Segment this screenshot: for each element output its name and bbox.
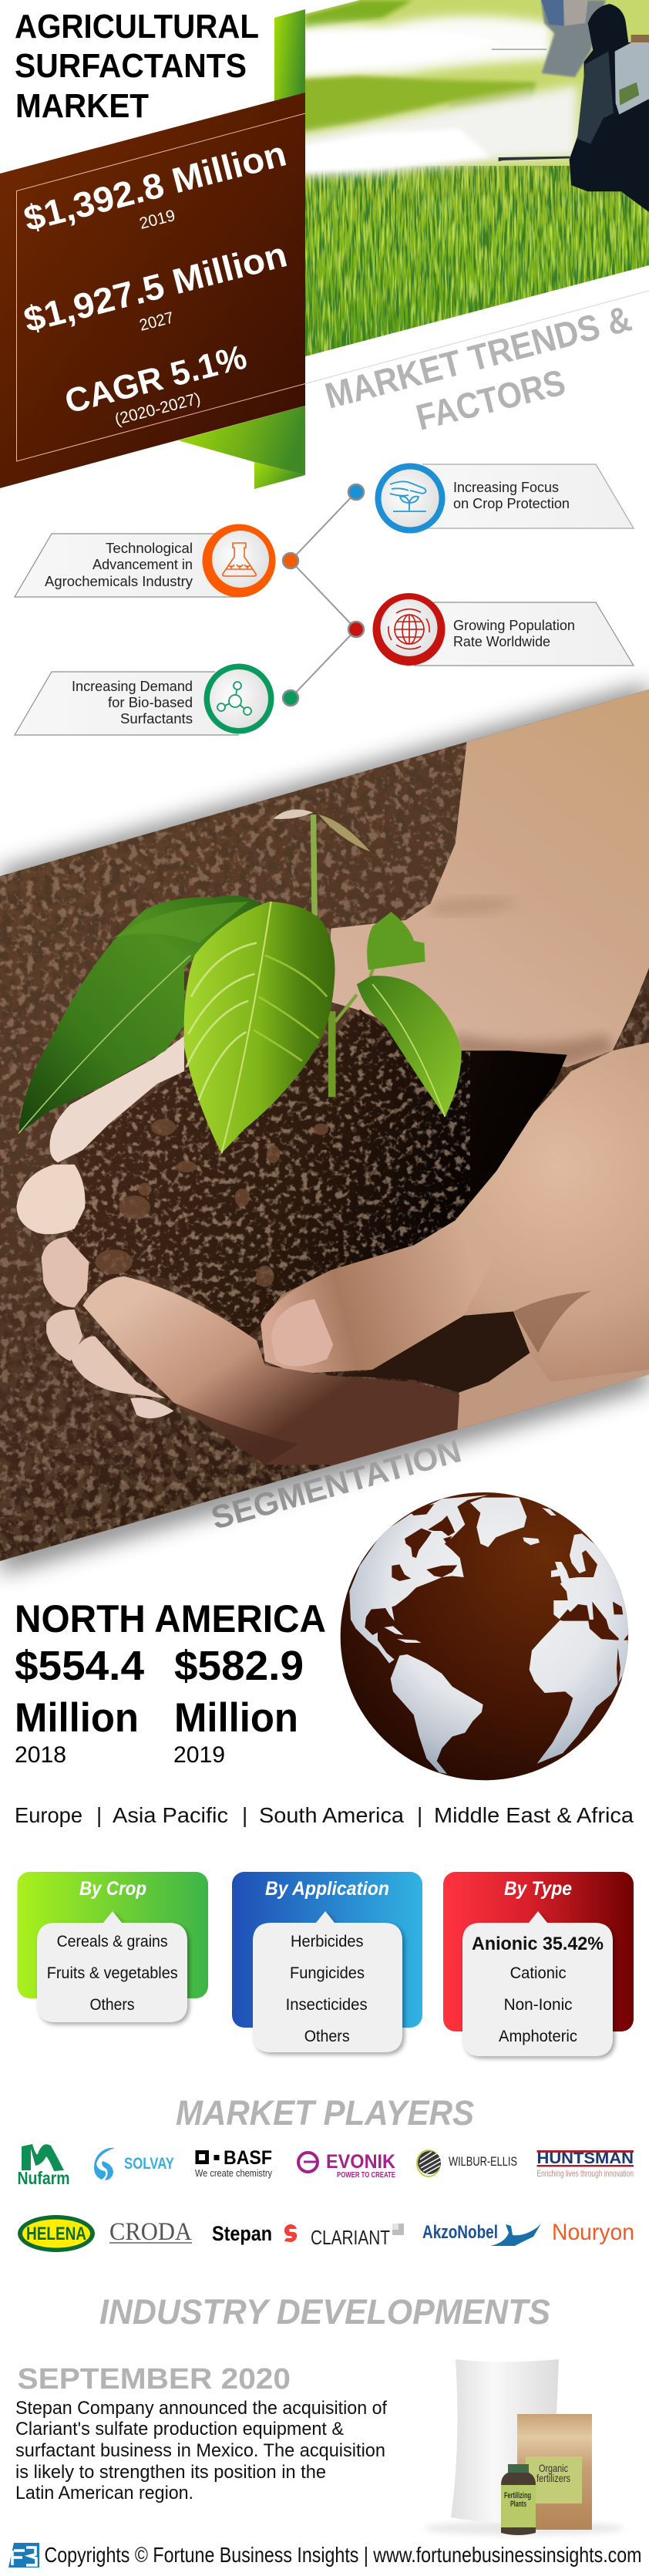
trend dots bbox=[283, 484, 364, 706]
logo: Huntsman bbox=[536, 2150, 634, 2179]
panel: north america stats bbox=[15, 1597, 326, 1768]
bottle bbox=[501, 2464, 536, 2535]
trend: technological advancement bbox=[15, 524, 276, 597]
stat: 2018: 2018 bbox=[15, 1742, 66, 1768]
list items: Others bbox=[89, 1996, 134, 2014]
stat: CAGR: CAGR 5.1% bbox=[61, 338, 251, 421]
stat: 2018: Million bbox=[15, 1695, 139, 1741]
list items: Fungicides bbox=[290, 1964, 365, 1982]
photo: farmer spraying a green field bbox=[298, 0, 649, 359]
development description: Clariant's sulfate production equipment & bbox=[15, 2419, 344, 2439]
trend: growing population bbox=[373, 593, 634, 666]
panel: by crop: By Crop bbox=[79, 1878, 146, 1900]
heading: industry developments: INDUSTRY DEVELOPMENTS bbox=[99, 2292, 550, 2332]
stat: 2018: $554.4 bbox=[15, 1643, 144, 1689]
logo: Helena bbox=[18, 2215, 95, 2252]
person in foreground bbox=[570, 4, 649, 212]
logo: Solvay bbox=[94, 2148, 174, 2180]
other regions list: | bbox=[417, 1803, 422, 1827]
logo: Evonik: EVONIK bbox=[326, 2151, 395, 2173]
lower right hand bbox=[261, 1043, 649, 1430]
label text: Technological bbox=[106, 541, 193, 556]
soil clods bbox=[96, 1119, 328, 1287]
other regions list: Middle East & Africa bbox=[434, 1803, 634, 1827]
panel: by type bbox=[443, 1872, 634, 2056]
logo: Evonik bbox=[298, 2151, 395, 2180]
other regions list: Asia Pacific bbox=[113, 1803, 228, 1827]
list items: Non-Ionic bbox=[504, 1996, 573, 2014]
list items bbox=[286, 1933, 368, 2045]
stat: 2019 market size: $1,392.8 Million bbox=[20, 133, 291, 239]
middle grass band bbox=[298, 76, 536, 133]
other regions list: Europe bbox=[15, 1803, 82, 1827]
icon: flask with seedlings bbox=[223, 543, 256, 576]
thumb bbox=[261, 1220, 472, 1373]
label text: Growing Population bbox=[453, 618, 575, 633]
logo: BASF: We create chemistry bbox=[195, 2167, 272, 2179]
soil on the palm bbox=[344, 1312, 530, 1392]
stat: 2019 market size: 2019 bbox=[138, 207, 177, 233]
stat: 2027 market size: 2027 bbox=[138, 309, 176, 335]
continents bbox=[349, 1495, 630, 1774]
seedling bbox=[18, 810, 462, 1153]
other regions list: | bbox=[242, 1803, 247, 1827]
logo: Solvay: SOLVAY bbox=[124, 2155, 174, 2173]
list items: Cationic bbox=[510, 1964, 567, 1982]
upper hand bbox=[327, 678, 649, 1067]
upper mist bbox=[298, 16, 552, 79]
illustration: fertilizer bag and bottle bbox=[424, 2359, 624, 2535]
photo: hands holding soil and seedling bbox=[0, 678, 649, 1566]
logo: Huntsman: HUNTSMAN bbox=[536, 2150, 634, 2167]
logo: Croda: CRODA bbox=[109, 2218, 192, 2246]
heading: segmentation: SEGMENTATION bbox=[207, 1432, 465, 1536]
logo: Nufarm bbox=[17, 2144, 69, 2188]
icon: globe with arrows bbox=[388, 609, 429, 649]
seas cut out of the continents bbox=[392, 1504, 623, 1688]
footer logo bbox=[8, 2543, 39, 2568]
logo: BASF bbox=[195, 2147, 272, 2179]
label text: Increasing Demand bbox=[72, 679, 193, 694]
stat: 2019: 2019 bbox=[173, 1742, 225, 1768]
label text: on Crop Protection bbox=[453, 496, 570, 511]
list items bbox=[472, 1934, 604, 2045]
grass strip at top left bbox=[305, 0, 413, 29]
list items: Herbicides bbox=[291, 1933, 364, 1951]
logo: Wilbur-Ellis bbox=[417, 2150, 517, 2176]
label text: for Bio-based bbox=[108, 695, 193, 710]
label text: Rate Worldwide bbox=[453, 634, 550, 649]
lower mist bbox=[298, 85, 577, 177]
label text bbox=[45, 541, 193, 589]
decorative green ribbon below the stats band bbox=[178, 406, 305, 489]
list items: Others bbox=[304, 2028, 350, 2045]
panel: north america stats: NORTH AMERICA bbox=[15, 1597, 326, 1640]
globe bbox=[341, 1492, 630, 1780]
title: MARKET bbox=[15, 87, 149, 125]
trend: bio-based surfactants bbox=[15, 663, 274, 735]
stat: 2019 bbox=[173, 1643, 304, 1768]
label text bbox=[72, 679, 193, 727]
logo: Nouryon: Nouryon bbox=[552, 2220, 634, 2245]
development description: surfactant business in Mexico. The acquisition bbox=[15, 2440, 385, 2461]
logo: BASF: BASF bbox=[224, 2147, 272, 2169]
label text: Increasing Focus bbox=[453, 480, 559, 495]
other regions list: | bbox=[96, 1803, 102, 1827]
bottle: Fertilizing bbox=[504, 2491, 531, 2500]
kraft bag bbox=[517, 2414, 592, 2530]
list items: Amphoteric bbox=[499, 2028, 577, 2045]
label text: Advancement in bbox=[92, 557, 193, 572]
title bbox=[15, 8, 259, 125]
panel: by application: By Application bbox=[265, 1878, 389, 1900]
logo: Clariant: CLARIANT bbox=[311, 2226, 390, 2249]
title: SURFACTANTS bbox=[15, 47, 247, 85]
logo: Nufarm: Nufarm bbox=[17, 2168, 69, 2188]
icon: molecule bbox=[217, 682, 251, 715]
heading: market trends and factors: FACTORS bbox=[412, 361, 570, 438]
label text bbox=[453, 618, 575, 649]
kraft bag: fertilizers bbox=[536, 2472, 570, 2484]
soil mound bbox=[62, 1003, 567, 1337]
list items: Fruits & vegetables bbox=[47, 1964, 178, 1982]
trend: increasing focus on crop protection bbox=[375, 463, 634, 534]
stat: 2018 bbox=[15, 1643, 144, 1768]
list items bbox=[47, 1933, 178, 2014]
other regions list: South America bbox=[259, 1803, 404, 1827]
label text: Surfactants bbox=[120, 711, 193, 727]
shadow around the hands photo bbox=[0, 686, 649, 1571]
list items: Anionic 35.42% bbox=[472, 1934, 604, 1954]
label text: Agrochemicals Industry bbox=[45, 574, 193, 589]
panel: by application bbox=[232, 1872, 422, 2052]
development description bbox=[15, 2398, 387, 2504]
panel: by crop bbox=[17, 1872, 208, 2022]
list items: Cereals & grains bbox=[57, 1933, 168, 1951]
heading: market players: MARKET PLAYERS bbox=[176, 2093, 474, 2133]
decorative green ribbon behind the stats band bbox=[274, 9, 305, 131]
person in background bbox=[541, 0, 606, 77]
fingers bbox=[49, 1036, 184, 1162]
label text bbox=[453, 480, 570, 511]
development date: SEPTEMBER 2020 bbox=[17, 2363, 291, 2396]
stat: 2019: $582.9 bbox=[174, 1643, 304, 1689]
logo: Helena: HELENA bbox=[26, 2224, 86, 2244]
development description: Stepan Company announced the acquisition of bbox=[15, 2398, 387, 2419]
logo: Stepan: Stepan bbox=[212, 2222, 272, 2245]
list items: Insecticides bbox=[286, 1996, 368, 2014]
development description: Latin American region. bbox=[15, 2483, 193, 2504]
logo: Evonik: POWER TO CREATE bbox=[337, 2171, 395, 2180]
connector lines between trend dots bbox=[291, 492, 356, 698]
backpack bbox=[615, 41, 649, 114]
title: AGRICULTURAL bbox=[15, 8, 259, 46]
stat: 2019: Million bbox=[174, 1695, 298, 1741]
stat: 2027 market size: $1,927.5 Million bbox=[20, 234, 291, 340]
panel: market size stats band bbox=[0, 93, 305, 488]
left palm bbox=[82, 1276, 459, 1465]
panel: by type: By Type bbox=[504, 1878, 572, 1900]
icon: hand over sprout bbox=[390, 481, 426, 511]
kraft bag: Organic bbox=[539, 2462, 568, 2474]
logo: Wilbur-Ellis: WILBUR-ELLIS bbox=[449, 2154, 517, 2169]
spray wand bbox=[499, 157, 570, 161]
logo: AkzoNobel: AkzoNobel bbox=[422, 2222, 498, 2243]
bottle: Plants bbox=[510, 2500, 526, 2509]
other regions list bbox=[15, 1803, 634, 1827]
stat: CAGR: (2020-2027) bbox=[113, 389, 203, 429]
development description: is likely to strengthen its position in the bbox=[15, 2462, 326, 2483]
